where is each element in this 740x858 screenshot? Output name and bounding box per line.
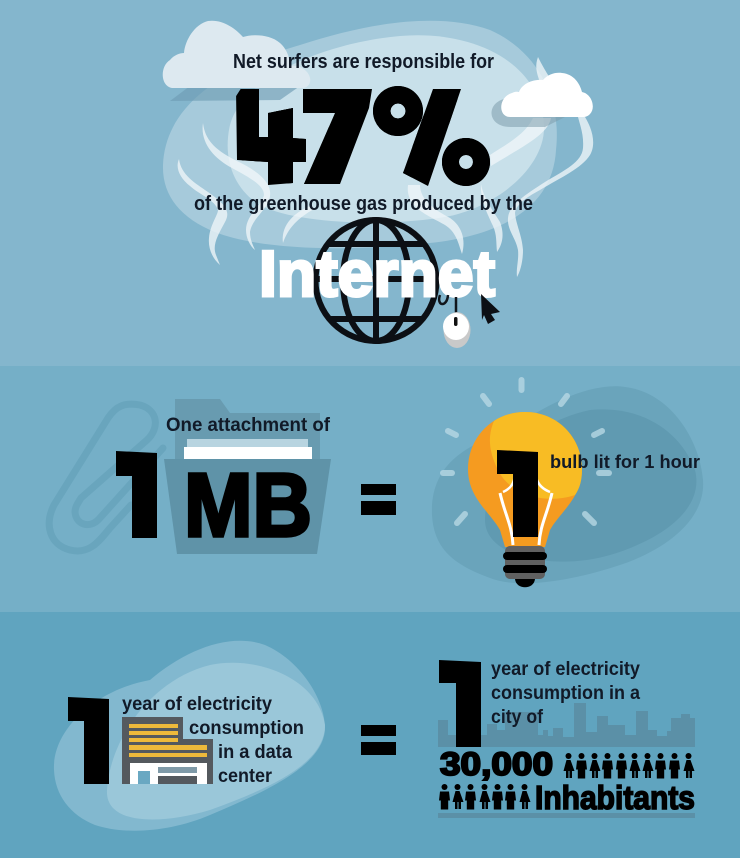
panel: top internet section <box>162 20 594 348</box>
big number: 1 left: 1 <box>65 675 131 807</box>
big text: 30,000: 30,000 <box>440 746 553 782</box>
icon: people row one <box>564 753 694 778</box>
icon: city skyline <box>438 703 695 747</box>
base bar <box>438 813 695 818</box>
text: of the greenhouse gas: of the greenhouse gas produced by the <box>194 193 533 215</box>
equals sign <box>361 484 396 515</box>
bulb base <box>503 546 547 587</box>
text: year of electricity left block: consumption <box>189 718 304 739</box>
icon: left cloud <box>163 21 310 101</box>
background blob left <box>54 641 325 831</box>
icon: mouse <box>443 312 470 348</box>
panel: attachment section <box>0 366 740 612</box>
big number: 47 percent <box>236 86 490 186</box>
text: year of electricity left block: center <box>218 766 273 787</box>
background blob behind bulb <box>432 386 703 583</box>
icon: light bulb <box>468 412 582 587</box>
text: year of electricity left block: in a data <box>218 742 292 763</box>
text: year of electricity left block <box>122 694 304 787</box>
text: bulb lit for 1 hour: bulb lit for 1 hour <box>550 452 700 472</box>
icon: people row two <box>439 784 530 810</box>
big text: inhabitants: Inhabitants <box>535 779 695 816</box>
text: year of electricity right block: consumption in a <box>491 683 640 704</box>
big number: 47 percent: 47 <box>240 74 370 206</box>
text: year of electricity right block: city of <box>491 707 544 728</box>
icon: paperclip <box>49 404 163 551</box>
text: year of electricity left block: year of electricity <box>122 694 272 715</box>
text: year of electricity right block <box>491 659 640 728</box>
icon: mouse cable <box>439 295 456 314</box>
icon: right cloud <box>491 73 593 127</box>
smoke wisps <box>178 57 593 277</box>
smoke background blobs <box>163 21 557 248</box>
icon: folder <box>164 399 331 554</box>
text: year of electricity right block: year of electricity <box>491 659 640 680</box>
icon: cursor <box>481 294 500 324</box>
icon: globe <box>316 220 436 341</box>
text: one attachment of: One attachment of <box>166 415 331 436</box>
big number: 1 right: 1 <box>436 638 502 770</box>
big number: 1 in bulb: 1 <box>494 428 560 560</box>
text: net surfers intro: Net surfers are responsible for <box>233 51 494 73</box>
big number: 1: 1 <box>112 429 178 561</box>
icon: data center building <box>122 717 213 784</box>
big number: 47 percent: % <box>376 74 488 206</box>
text: internet: Internet <box>259 237 495 310</box>
equals sign <box>361 725 396 755</box>
panel: data center section <box>0 612 740 858</box>
big text: MB: MB <box>184 456 312 556</box>
icon: light rays <box>443 380 609 523</box>
